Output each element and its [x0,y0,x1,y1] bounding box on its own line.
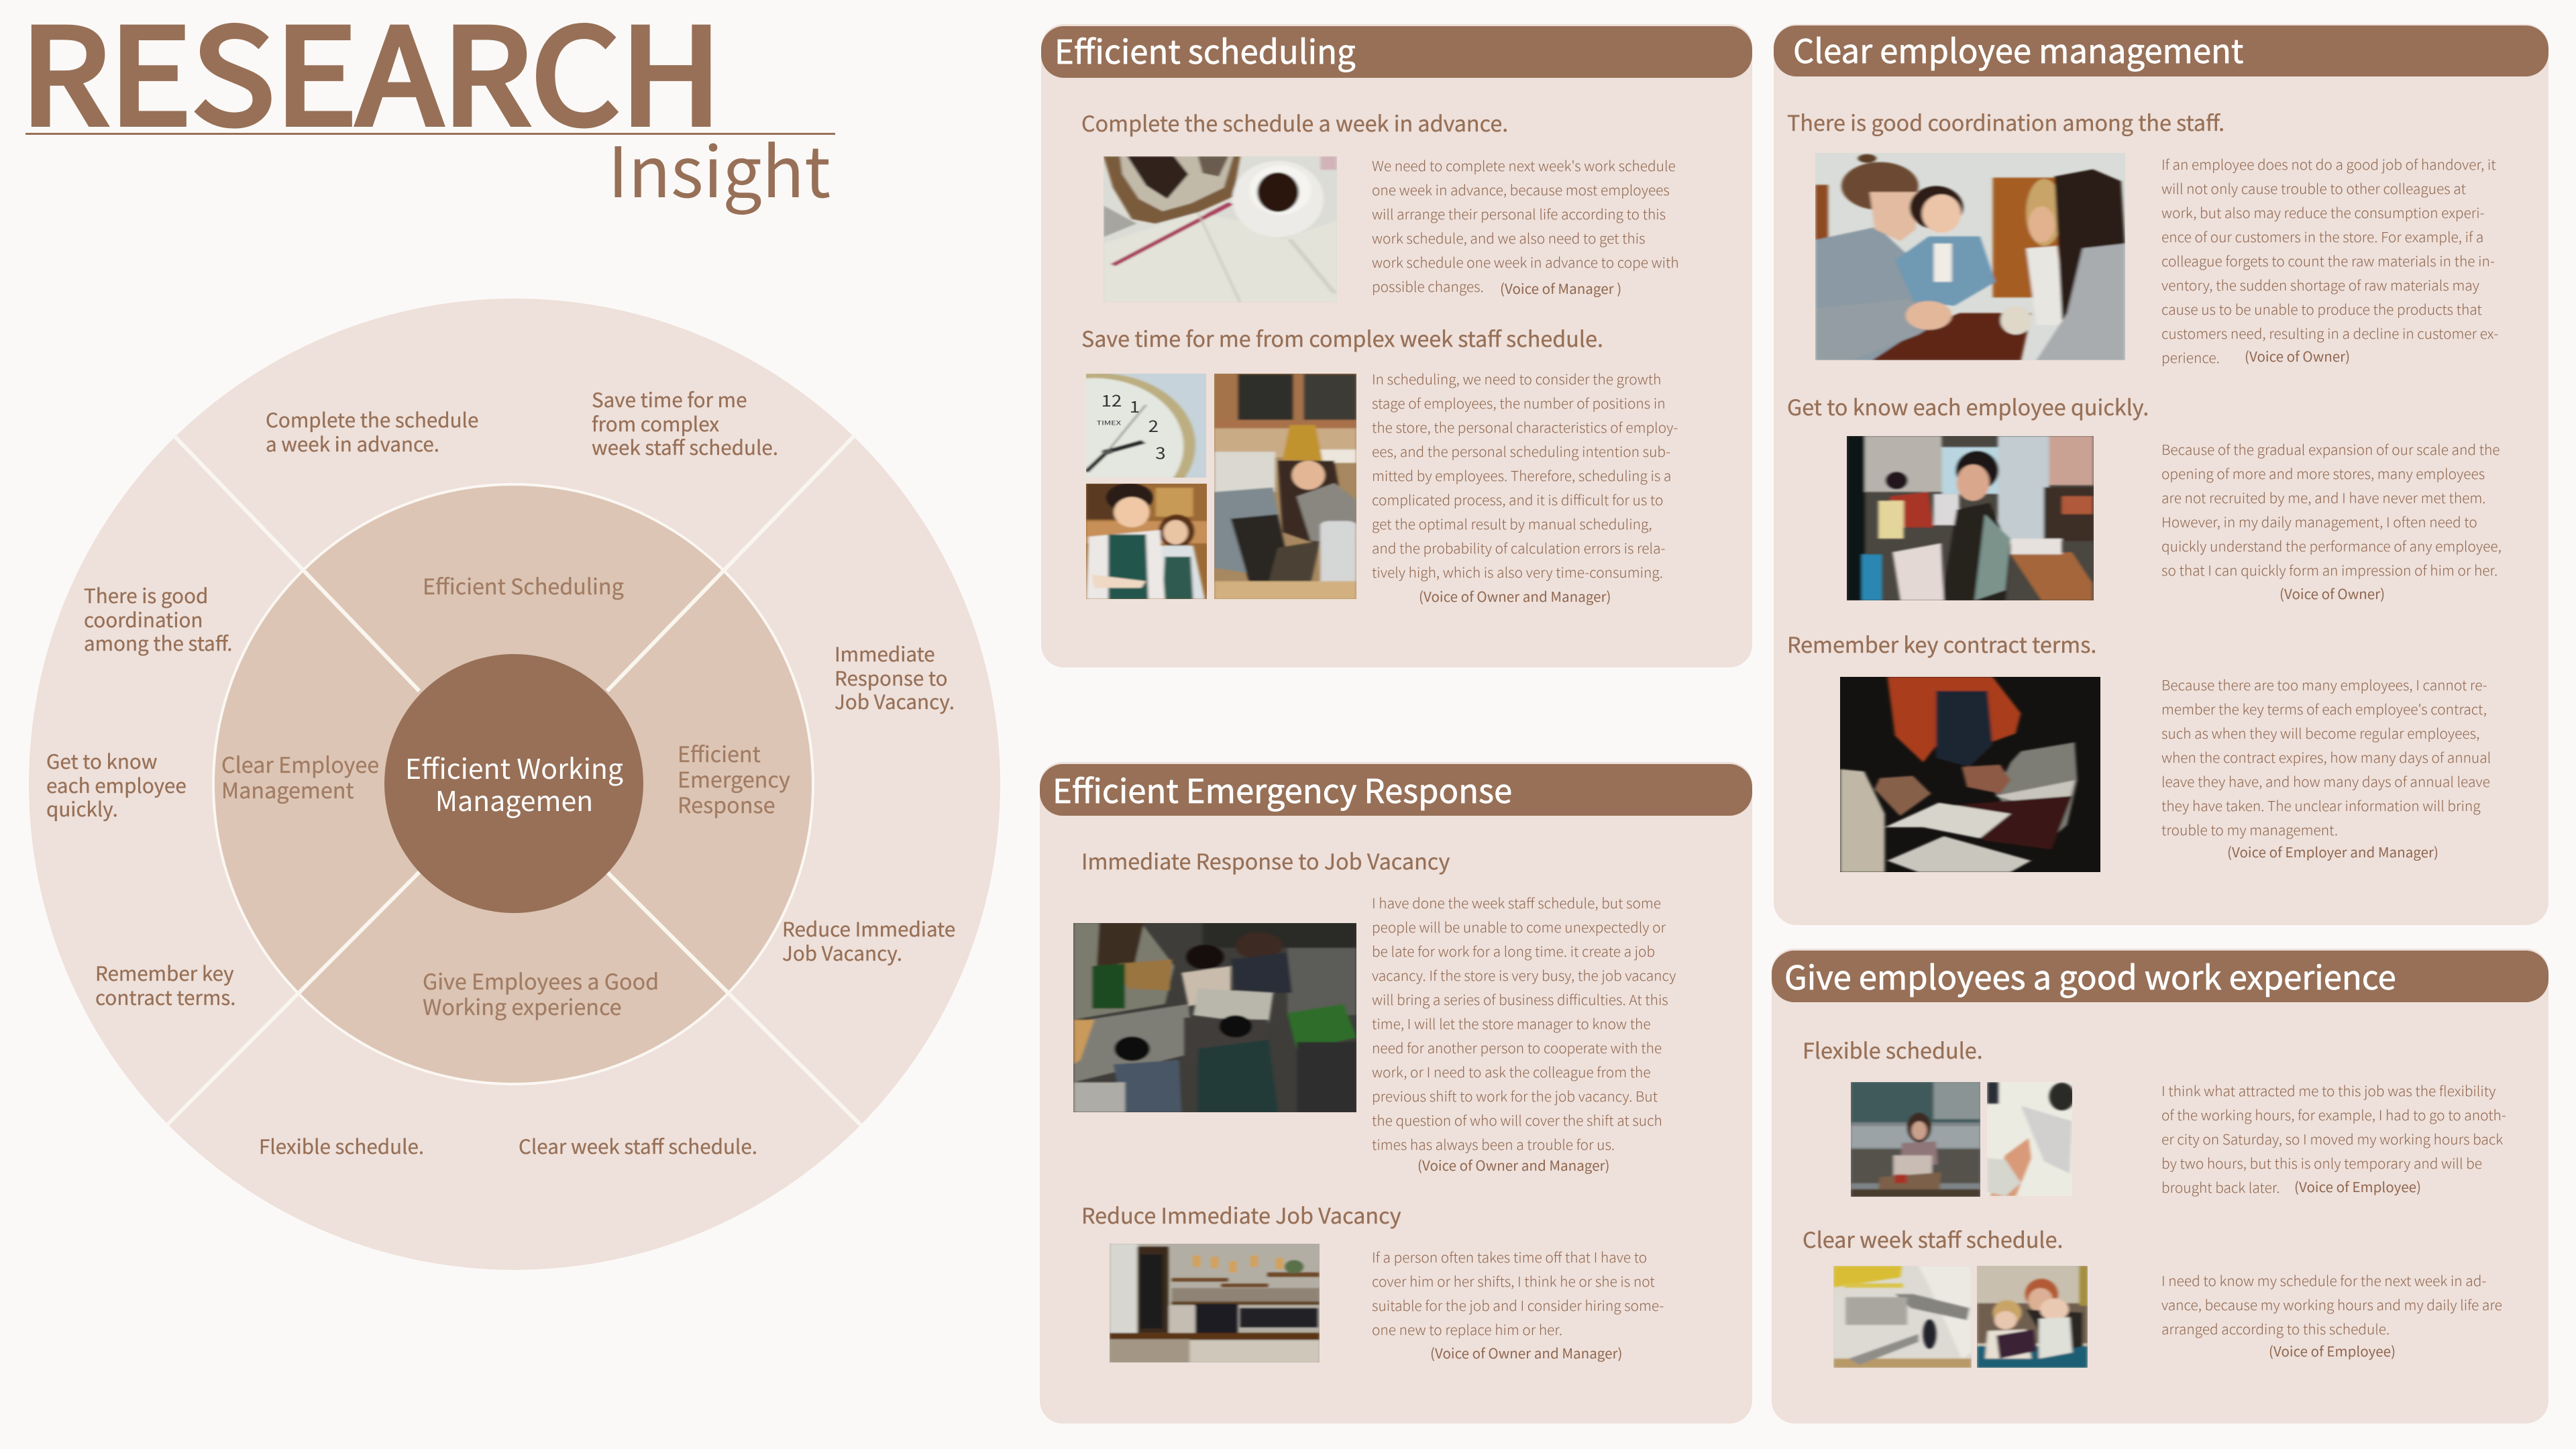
text: coordination quote: will not only cause trouble to other colleagues at [2161,178,2466,199]
text: job vacancy quote: times has always been a trouble for us. [1372,1134,1615,1155]
text: complex scheduling quote: and the probability of calculation errors is rela- [1372,538,1665,558]
inner label: employee management [221,749,379,805]
panel header [1774,25,2548,76]
text: flexibility quote: brought back later. [2161,1177,2280,1197]
inner label: work experience [423,965,659,1022]
text: complex scheduling quote: mitted by employees. Therefore, scheduling is a [1372,466,1671,486]
text: flexibility quote: by two hours, but this is only temporary and will be [2161,1153,2482,1173]
photo: alarm clock: TIMEX [1096,419,1122,427]
text: job vacancy quote: will bring a series of business difficulties. At this [1372,989,1668,1010]
text: job vacancy quote: be late for work for a long time. it create a job [1372,941,1655,961]
outer label [266,405,478,458]
subheading: Insight: Insight [608,116,830,217]
text: flexibility quote [2161,1081,2506,1197]
title: RESEARCH Insight [20,0,835,217]
text: replace staff quote: cover him or her shifts, I think he or she is not [1372,1271,1655,1291]
outer label: Response to [835,663,948,691]
text: schedule quote [1372,156,1679,297]
text: coordination quote: customers need, resulting in a decline in customer ex- [2161,323,2498,343]
outer label: Complete the schedule [266,405,478,433]
heading: efficient scheduling: Efficient scheduling [1055,26,1356,74]
subheading: Get to know each employee quickly. [1787,391,2149,422]
photo: barista with yellow beanie [1214,374,1356,599]
outer label [782,914,955,966]
text: schedule needs quote: arranged according to this schedule. [2161,1319,2390,1339]
text: complex scheduling quote: get the optimal result by manual scheduling, [1372,514,1652,534]
photo: coffee and planner [1104,156,1337,303]
inner label: employee management: Management [221,774,354,805]
outer label: Job Vacancy. [782,938,902,966]
voice attribution: (Voice of Owner) [2279,583,2385,603]
text: employee knowledge quote: quickly understand the performance of any employee, [2161,536,2502,556]
text: job vacancy quote: time, I will let the store manager to know the [1372,1014,1651,1034]
photo: employee behind counter [1847,436,2094,600]
panel header [1041,26,1752,78]
text: complex scheduling quote [1372,369,1678,582]
subheading: Remember key contract terms. [1787,629,2096,659]
text: contract quote: they have taken. The unclear information will bring [2161,796,2481,816]
text: schedule quote: will arrange their personal life according to this [1372,204,1666,224]
text: replace staff quote: If a person often takes time off that I have to [1372,1247,1647,1267]
panel: efficient emergency response [1040,762,1752,1424]
outer label: Save time for me [592,384,747,413]
outer label [835,639,955,715]
text: contract quote: such as when they will become regular employees, [2161,723,2479,743]
text: job vacancy quote: the question of who will cover the shift at such [1372,1110,1662,1130]
inner label: scheduling: Efficient Scheduling [423,570,624,601]
text: schedule needs quote: vance, because my working hours and my daily life are [2161,1295,2502,1315]
outer label: Immediate [835,639,935,667]
panel: clear employee management [1774,24,2548,925]
panel: give employees a good work experience [1772,949,2548,1424]
photo: woman with laptop outdoors [1851,1082,1980,1197]
photo: alarm clock: 12 [1101,388,1122,412]
text: complex scheduling quote: ees, and the personal scheduling intention sub- [1372,441,1670,462]
outer label: each employee [46,770,186,798]
text: employee knowledge quote: are not recruited by me, and I have never met them. [2161,488,2485,508]
outer label: among the staff. [84,628,232,657]
text: job vacancy quote: people will be unable to come unexpectedly or [1372,917,1666,937]
text: complex scheduling quote: In scheduling, we need to consider the growth [1372,369,1661,389]
outer label: coordination [84,604,203,633]
text: coordination quote: work, but also may reduce the consumption experi- [2161,203,2485,223]
heading: efficient emergency response: Efficient Emergency Response [1053,765,1512,813]
text: schedule quote: work schedule, and we also need to get this [1372,228,1646,248]
photo: mother with children and tablet [1977,1266,2088,1368]
text: flexibility quote: of the working hours, for example, I had to go to anoth- [2161,1105,2506,1125]
photo: alarm clock: 2 [1148,414,1159,437]
outer label: quickly. [46,794,118,822]
text: flexibility quote: I think what attracted me to this job was the flexibility [2161,1081,2496,1101]
outer label: week staff schedule. [592,432,778,461]
voice attribution: (Voice of Employer and Manager) [2227,841,2438,861]
text: contract quote: trouble to my management. [2161,820,2338,840]
subheading: Reduce Immediate Job Vacancy [1081,1199,1401,1230]
text: employee knowledge quote: However, in my daily management, I often need to [2161,512,2477,532]
outer label [95,958,236,1010]
photo: two baristas [1086,484,1207,599]
center label [405,747,623,819]
heading: good work experience: Give employees a good work experience [1784,952,2396,1000]
photo: calendar with marker [1833,1266,1972,1368]
title rule [25,133,835,135]
inner label: employee management: Clear Employee [221,749,379,780]
subheading: Flexible schedule. [1803,1034,1983,1065]
text: schedule quote: work schedule one week in advance to cope with [1372,252,1679,272]
text: contract quote: when the contract expires, how many days of annual [2161,747,2491,767]
outer label: from complex [592,408,719,437]
voice attribution: (Voice of Owner and Manager) [1417,1155,1609,1175]
outer label: contract terms. [95,982,236,1010]
text: schedule quote: one week in advance, because most employees [1372,180,1670,200]
outer label: Flexible schedule. [259,1131,424,1160]
text: complex scheduling quote: stage of employees, the number of positions in [1372,393,1666,413]
text: job vacancy quote: need for another person to cooperate with the [1372,1038,1662,1058]
panel: efficient scheduling [1041,24,1752,667]
subheading: There is good coordination among the staff. [1787,107,2224,138]
panel header [1040,764,1752,816]
text: contract quote [2161,675,2491,840]
subheading: Save time for me from complex week staff schedule. [1081,323,1603,354]
outer label: Job Vacancy. [835,686,955,715]
inner label: emergency response: Efficient [678,738,761,769]
photo: team at table [1815,153,2125,360]
photo: alarm clock [1086,374,1206,478]
text: replace staff quote: suitable for the job and I consider hiring some- [1372,1295,1664,1316]
photo: signing contract [1840,677,2100,872]
text: complex scheduling quote: complicated process, and it is difficult for us to [1372,490,1663,510]
text: contract quote: Because there are too many employees, I cannot re- [2161,675,2487,695]
text: job vacancy quote: I have done the week staff schedule, but some [1372,893,1661,913]
outer label [84,580,232,657]
photo: alarm clock: 3 [1155,441,1166,464]
inner label: work experience: Give Employees a Good [423,965,659,996]
text: schedule quote: possible changes. [1372,276,1484,297]
voice attribution: (Voice of Owner) [2245,345,2350,366]
text: contract quote: member the key terms of each employee's contract, [2161,699,2487,719]
outer label [46,746,186,822]
text: employee knowledge quote: so that I can quickly form an impression of him or her. [2161,560,2498,580]
voice attribution: (Voice of Owner and Manager) [1430,1342,1622,1362]
text: job vacancy quote: previous shift to work for the job vacancy. But [1372,1086,1658,1106]
photo: alarm clock: 1 [1130,394,1140,418]
text: schedule quote: We need to complete next week's work schedule [1372,156,1676,176]
center label: Efficient Working [405,747,623,787]
text: coordination quote: ventory, the sudden shortage of raw materials may [2161,275,2479,295]
panel header [1772,951,2548,1002]
outer label: Remember key [95,958,234,987]
text: coordination quote: colleague forgets to count the raw materials in the in- [2161,251,2495,271]
photo: overhead cafe counter [1073,923,1356,1112]
outer label [592,384,778,461]
text: job vacancy quote: vacancy. If the store is very busy, the job vacancy [1372,965,1676,985]
outer label: There is good [84,580,208,609]
inner label: emergency response: Emergency [678,763,790,794]
text: coordination quote [2161,154,2498,368]
outer label: Clear week staff schedule. [519,1131,757,1160]
text: coordination quote: cause us to be unable to produce the products that [2161,299,2482,319]
text: complex scheduling quote: tively high, which is also very time-consuming. [1372,562,1663,582]
photo: hand writing in notebook [1987,1082,2072,1196]
text: schedule needs quote [2161,1269,2502,1341]
text: contract quote: leave they have, and how many days of annual leave [2161,771,2490,792]
outer label: Get to know [46,746,157,775]
outer label: a week in advance. [266,428,439,458]
concentric diagram: efficient working management [29,299,1000,1270]
subheading: Complete the schedule a week in advance. [1081,107,1508,138]
text: employee knowledge quote [2161,439,2502,580]
inner label: emergency response [678,738,790,820]
outer label: Reduce Immediate [782,914,955,943]
text: coordination quote: ence of our customers in the store. For example, if a [2161,227,2483,247]
inner label: emergency response: Response [678,789,775,820]
text: coordination quote: perience. [2161,347,2220,368]
text: flexibility quote: er city on Saturday, so I moved my working hours back [2161,1129,2503,1149]
subheading: Clear week staff schedule. [1803,1224,2063,1254]
voice attribution: (Voice of Employee) [2269,1340,2396,1360]
text: complex scheduling quote: the store, the personal characteristics of employ- [1372,417,1678,437]
text: employee knowledge quote: opening of more and more stores, many employees [2161,464,2485,484]
inner label: work experience: Working experience [423,991,622,1022]
text: job vacancy quote: work, or I need to ask the colleague from the [1372,1062,1651,1082]
voice attribution: (Voice of Employee) [2294,1176,2421,1196]
voice attribution: (Voice of Manager ) [1500,278,1621,298]
text: schedule needs quote: I need to know my schedule for the next week in ad- [2161,1271,2486,1291]
text: employee knowledge quote: Because of the gradual expansion of our scale and the [2161,439,2500,460]
subheading: Immediate Response to Job Vacancy [1081,845,1450,876]
text: replace staff quote [1372,1247,1664,1340]
heading: clear employee management: Clear employee management [1793,25,2243,73]
center label: Managemen [435,779,593,819]
text: coordination quote: If an employee does not do a good job of handover, it [2161,154,2496,174]
text: job vacancy quote [1372,893,1676,1155]
text: replace staff quote: one new to replace him or her. [1372,1320,1562,1340]
photo: cafe shelves and pendant lights [1110,1244,1320,1362]
voice attribution: (Voice of Owner and Manager) [1419,586,1611,606]
